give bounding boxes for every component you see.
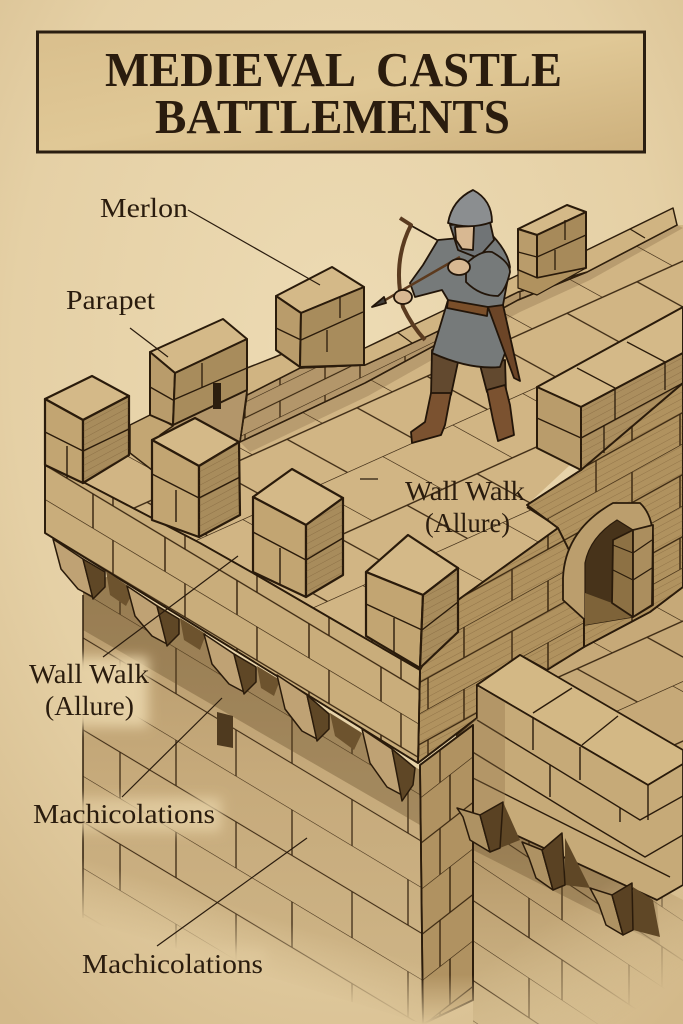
merlon: parapet label target — [150, 319, 247, 425]
corbel 8 — [590, 883, 660, 937]
front merlon 2 — [152, 418, 240, 537]
label: Wall Walk (Allure) upper: Wall Walk — [405, 476, 526, 506]
title text: BATTLEMENTS — [155, 89, 510, 144]
arch surround — [563, 503, 653, 620]
wall face behind second merlon — [150, 390, 247, 470]
shaded base of back wall — [240, 225, 683, 452]
front parapet band: left face — [45, 465, 420, 763]
front parapet edge — [527, 507, 558, 527]
label: Wall Walk (Allure) lower — [29, 659, 150, 721]
corbel 4 — [277, 675, 362, 750]
corbel 6 — [457, 802, 520, 852]
label: Wall Walk (Allure) upper: (Allure) — [425, 508, 510, 538]
archer figure — [372, 190, 520, 443]
lower floor beyond the wall — [520, 587, 683, 750]
label: Machicolations upper: Machicolations — [33, 799, 215, 829]
corbel 2 — [127, 586, 206, 650]
back parapet wall — [130, 208, 677, 470]
bow — [399, 218, 425, 340]
lower left wall — [83, 575, 424, 1024]
front merlon 4 — [366, 535, 458, 668]
label: Merlon: Merlon — [100, 193, 189, 223]
wall slit — [217, 712, 233, 748]
label: Machicolations lower: Machicolations — [82, 949, 263, 979]
left wall stub — [130, 414, 173, 470]
label: Wall Walk (Allure) lower: (Allure) — [45, 691, 134, 721]
arrow — [380, 257, 460, 303]
front merlon 1 — [45, 376, 129, 483]
coif and helmet — [450, 222, 494, 258]
front parapet band: right face — [418, 528, 584, 763]
boots — [411, 393, 451, 443]
machicolation corbels: right wall — [457, 802, 660, 937]
upper right wall with archway — [527, 353, 683, 647]
wall top stones — [247, 208, 677, 395]
corbel 5 — [362, 729, 415, 801]
title text — [105, 42, 562, 144]
tunic — [410, 235, 510, 367]
machicolation corbels: left wall — [53, 539, 415, 801]
corbel 3 — [204, 634, 280, 696]
title text: CASTLE — [376, 42, 562, 97]
bow string — [410, 225, 437, 240]
label: Wall Walk (Allure) lower: Wall Walk — [29, 659, 150, 689]
right merlons — [537, 307, 683, 470]
forward arm — [466, 252, 510, 296]
legs — [431, 350, 458, 395]
leader lines — [103, 210, 378, 946]
arch pier — [612, 530, 633, 617]
lower right wall — [473, 838, 683, 1024]
floor: wall walk paving — [85, 225, 683, 670]
belt — [447, 300, 488, 316]
corner column — [420, 725, 473, 1024]
label: Wall Walk (Allure) upper — [405, 476, 526, 538]
title banner — [38, 32, 644, 152]
hands — [394, 290, 412, 304]
scabbard — [488, 305, 520, 381]
title text: MEDIEVAL — [105, 42, 356, 97]
label: Parapet: Parapet — [66, 285, 156, 315]
arrow slit — [213, 383, 221, 409]
front merlon 3 — [253, 469, 343, 597]
lower parapet block — [457, 655, 683, 900]
corbel 7 — [522, 833, 590, 890]
corbel 1 — [53, 539, 134, 606]
merlon: merlon label target — [276, 267, 364, 367]
merlon: far back — [518, 205, 586, 295]
